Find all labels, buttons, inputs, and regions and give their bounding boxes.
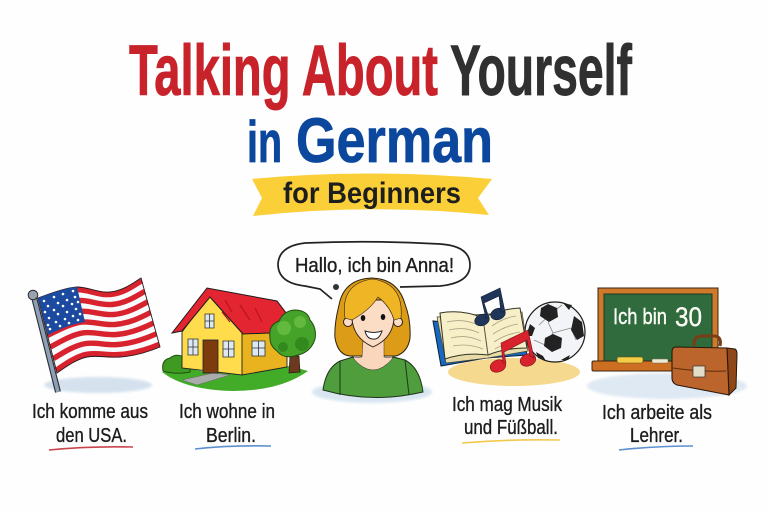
banner: for Beginners: for Beginners (283, 177, 461, 210)
icon: flag pole (28, 290, 58, 392)
side wall (241, 329, 287, 375)
shadow (44, 377, 152, 393)
panel: house (162, 288, 315, 391)
chalkboard: 30 (675, 302, 702, 332)
football (525, 302, 585, 362)
icon: US flag (38, 278, 160, 373)
banner: for Beginners (252, 174, 492, 216)
caption: Ich wohne in Berlin: Ich wohne in (179, 401, 275, 423)
neck (353, 340, 393, 370)
door (203, 340, 218, 373)
ears (344, 318, 352, 326)
fringe (344, 279, 401, 320)
hair back (335, 278, 410, 356)
icon: red music note (488, 330, 538, 374)
shadow (587, 373, 747, 399)
icon: briefcase (672, 336, 737, 395)
caption: Ich wohne in Berlin: Berlin. (206, 425, 256, 447)
caption: Ich komme aus den USA: Ich komme aus (32, 401, 148, 423)
bush (163, 355, 190, 373)
character: Anna (312, 278, 432, 403)
eyes (361, 315, 365, 321)
caption: Ich mag Musik und Fussball: Ich mag Musik (452, 394, 563, 416)
title: Talking About (129, 32, 438, 111)
lawn (162, 366, 308, 391)
front wall (182, 296, 242, 375)
speech bubble (278, 242, 470, 299)
caption: Ich komme aus den USA (32, 401, 148, 450)
garden path (182, 373, 230, 385)
panel: chalkboard and briefcase (587, 288, 747, 399)
chalkboard: Ich bin (613, 304, 667, 329)
caption: Ich arbeite als Lehrer: Ich arbeite als (602, 402, 712, 424)
sand (448, 358, 580, 386)
tree (270, 310, 315, 373)
windows (188, 314, 265, 357)
panel: flag (28, 278, 160, 393)
icon: navy music note (473, 288, 507, 328)
caption: Ich arbeite als Lehrer: Lehrer. (630, 425, 683, 447)
panel: music and football (433, 288, 585, 386)
roof (172, 288, 290, 334)
book (433, 308, 528, 366)
caption: Ich komme aus den USA: den USA. (56, 425, 127, 447)
title: German (296, 106, 493, 176)
caption: Ich mag Musik und Fussball (452, 394, 563, 443)
face (352, 300, 394, 347)
title: Yourself (450, 32, 632, 111)
caption: Ich wohne in Berlin (179, 401, 275, 449)
title (129, 32, 632, 176)
ground shadow (312, 381, 432, 403)
caption: Ich arbeite als Lehrer (602, 402, 712, 450)
speech bubble: Hallo, ich bin Anna! (295, 255, 454, 277)
caption: Ich mag Musik und Fussball: und Füßball. (464, 417, 558, 439)
chalkboard (592, 288, 718, 371)
smile (365, 331, 382, 339)
title: in (247, 110, 282, 175)
shirt (323, 357, 423, 398)
